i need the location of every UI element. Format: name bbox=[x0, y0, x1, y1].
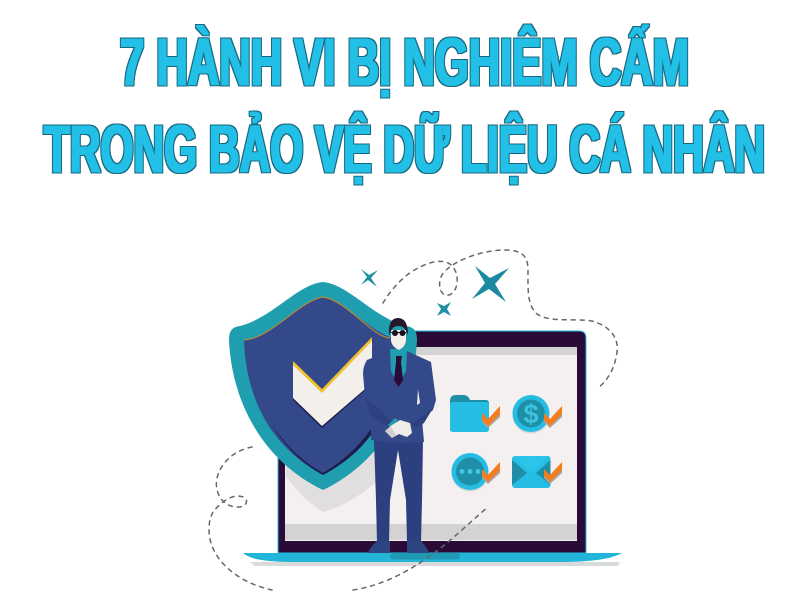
check shadow bbox=[293, 384, 370, 428]
dollar sign: $ bbox=[523, 399, 539, 429]
face bbox=[391, 330, 406, 350]
bubble bbox=[452, 454, 488, 492]
folder body bbox=[450, 402, 489, 432]
shield gold line bbox=[244, 297, 390, 340]
hair bbox=[389, 318, 408, 335]
icon: folder bbox=[450, 395, 489, 432]
trousers bbox=[374, 440, 423, 543]
star: small bottom bbox=[437, 302, 451, 316]
folder tab bbox=[450, 395, 489, 412]
tie bbox=[394, 356, 403, 387]
man in suit bbox=[363, 318, 460, 560]
dashed line: upper right bbox=[383, 250, 617, 388]
hands bbox=[385, 420, 412, 438]
laptop bbox=[243, 331, 622, 566]
screen bottom band bbox=[285, 524, 577, 540]
laptop base shadow bbox=[250, 562, 620, 566]
orange check: folder bbox=[482, 406, 500, 428]
check gold edge bbox=[293, 337, 372, 393]
laptop base bbox=[243, 553, 622, 562]
jacket bbox=[363, 351, 436, 443]
envelope body bbox=[512, 456, 550, 488]
collar bbox=[390, 349, 407, 386]
icon: chat bubble bbox=[452, 453, 488, 492]
icon: dollar coin bbox=[512, 395, 550, 434]
dots bbox=[460, 469, 480, 474]
orange check: coin bbox=[544, 406, 562, 428]
orange check: chat bbox=[482, 462, 500, 484]
envelope flap bbox=[514, 456, 549, 472]
check white bbox=[293, 338, 372, 426]
shield inner bbox=[244, 297, 402, 475]
envelope side fold bbox=[512, 460, 527, 485]
gap between arm and body bbox=[417, 389, 420, 405]
laptop body bbox=[278, 331, 586, 553]
shield outer bbox=[229, 282, 417, 490]
laptop screen bbox=[285, 347, 577, 541]
shoes bbox=[368, 541, 429, 553]
dashed line: lower left bbox=[209, 447, 272, 590]
orange check: envelope bbox=[544, 462, 562, 484]
star: small top bbox=[361, 269, 378, 287]
shield bbox=[229, 282, 417, 490]
shield shadow on screen bbox=[286, 440, 376, 512]
dashed line: lower right bbox=[353, 507, 488, 590]
cuff bbox=[388, 418, 398, 428]
star: large bbox=[472, 266, 509, 302]
screen top band bbox=[285, 347, 577, 355]
title bbox=[44, 25, 765, 187]
arm fold shade bbox=[365, 397, 433, 428]
check mark bbox=[293, 337, 372, 428]
shield dark edge bbox=[272, 410, 386, 475]
base reflection bbox=[390, 553, 460, 560]
icon: envelope bbox=[512, 456, 550, 488]
coin bbox=[512, 396, 550, 434]
sunglasses bbox=[391, 330, 406, 336]
